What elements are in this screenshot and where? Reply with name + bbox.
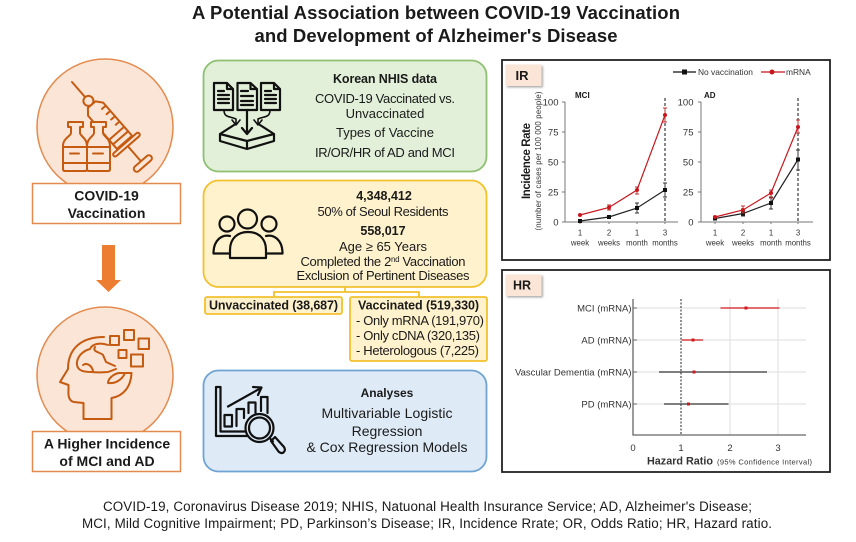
chart: MCI incidence: 1	[635, 228, 639, 238]
text: NHIS data: IR/OR/HR of AD and MCI	[315, 145, 455, 160]
chart: AD incidence	[678, 91, 813, 248]
footnote: abbreviations: COVID-19, Coronavirus Disease 2019; NHIS, Natuonal Health Insurance Service; AD, Alzheimer's Disease;	[103, 499, 752, 514]
chart: AD incidence: 50	[683, 158, 694, 168]
legend: No vaccination	[698, 67, 753, 77]
label: A Higher Incidence of MCI and AD	[32, 432, 180, 472]
chart: MCI incidence: 3	[663, 228, 667, 238]
box: unvaccinated: Unvaccinated (38,687)	[209, 298, 338, 312]
chart: AD incidence: month	[760, 238, 782, 248]
y axis title	[521, 91, 543, 230]
icon: people	[214, 210, 282, 258]
chart: AD incidence: 1	[713, 228, 717, 238]
chart: MCI incidence: 25	[548, 188, 558, 198]
chart: hazard ratio forest plot: (95% Confidence Interval)	[717, 458, 812, 466]
label: COVID-19 Vaccination: COVID-19	[74, 188, 139, 204]
box: vaccinated: - Heterologous (7,225)	[356, 343, 479, 358]
chart: AD incidence: months	[785, 238, 811, 248]
chart: MCI incidence: months	[652, 238, 678, 248]
chart: hazard ratio forest plot: 1	[678, 443, 684, 454]
text: NHIS data: Unvaccinated	[346, 106, 424, 121]
heading: HR	[506, 274, 542, 296]
text: NHIS data: COVID-19 Vaccinated vs.	[315, 91, 455, 106]
title	[192, 2, 680, 46]
icon: documents into tray	[214, 83, 280, 149]
text: cohort counts	[296, 189, 470, 283]
label: A Higher Incidence of MCI and AD: A Higher Incidence	[44, 436, 170, 452]
text: cohort counts: nd	[391, 255, 400, 264]
label: COVID-19 Vaccination	[32, 184, 180, 224]
text: analyses: Analyses	[361, 386, 414, 400]
chart: AD incidence: AD	[704, 91, 716, 100]
label: A Higher Incidence of MCI and AD: of MCI and AD	[59, 453, 155, 469]
text: cohort counts: Age ≥ 65 Years	[339, 239, 428, 254]
box: vaccinated: - Only cDNA (320,135)	[356, 328, 480, 343]
chart: hazard ratio forest plot: MCI (mRNA)	[577, 304, 632, 314]
text: analyses: Multivariable Logistic	[322, 405, 452, 421]
chart: MCI incidence: 50	[548, 158, 558, 168]
chart: AD incidence: 3	[796, 228, 800, 238]
chart: hazard ratio forest plot: Hazard Ratio	[647, 456, 713, 468]
chart: hazard ratio forest plot: Vascular Dementia (mRNA)	[515, 368, 632, 378]
chart: MCI incidence: 100	[543, 98, 558, 108]
legend	[673, 67, 811, 77]
chart: hazard ratio forest plot: 3	[775, 443, 781, 454]
text: NHIS data: Korean NHIS data	[333, 72, 438, 86]
chart: AD incidence: 0	[688, 218, 694, 228]
label: COVID-19 Vaccination: Vaccination	[68, 205, 145, 221]
chart: hazard ratio forest plot: 0	[630, 443, 636, 454]
chart: hazard ratio forest plot: AD (mRNA)	[581, 336, 632, 346]
panel: study population	[204, 180, 486, 287]
chart: AD incidence: 1	[769, 228, 773, 238]
chart: MCI incidence: weeks	[597, 238, 620, 248]
chart: MCI incidence	[543, 91, 678, 248]
panel: IR	[502, 60, 830, 260]
icon: chart with magnifier	[216, 387, 285, 453]
chart: hazard ratio forest plot: 2	[727, 443, 733, 454]
chart: AD incidence: 2	[741, 228, 745, 238]
panel: HR	[502, 270, 830, 472]
panel: analyses	[204, 370, 486, 472]
text: cohort counts: 558,017	[360, 224, 406, 238]
heading: HR: HR	[513, 278, 531, 292]
chart: MCI incidence: week	[570, 238, 589, 248]
arrow: vaccination to incidence	[96, 245, 121, 292]
panel: COVID-19 vaccination	[32, 59, 180, 224]
chart: MCI incidence: MCI	[575, 91, 590, 100]
chart: MCI incidence: month	[626, 238, 648, 248]
chart: hazard ratio forest plot: PD (mRNA)	[581, 400, 632, 410]
box: vaccinated: - Only mRNA (191,970)	[356, 313, 484, 328]
footnote: abbreviations: MCI, Mild Cognitive Impairment; PD, Parkinson’s Disease; IR, Incidence Rrate; OR, Odds Ratio; HR, Hazard ratio.	[82, 516, 772, 531]
chart: AD incidence: 25	[683, 188, 694, 198]
y axis title: Incidence Rate	[521, 123, 533, 199]
title: and Development of Alzheimer's Disease	[254, 25, 618, 46]
chart: MCI incidence: 0	[553, 218, 558, 228]
icon: syringe and vials	[37, 59, 173, 195]
chart: AD incidence: 75	[683, 128, 694, 138]
box: vaccinated: Vaccinated (519,330)	[358, 298, 479, 312]
chart: AD incidence: week	[705, 238, 724, 248]
heading: IR	[506, 64, 542, 86]
text: cohort counts: Vaccination	[399, 254, 466, 269]
text: NHIS data	[315, 72, 455, 160]
chart: hazard ratio forest plot	[515, 299, 812, 468]
text: analyses: Regression	[352, 423, 422, 439]
box: vaccinated	[350, 297, 487, 361]
legend: mRNA	[786, 67, 811, 77]
panel: Korean NHIS data	[204, 60, 486, 172]
chart: AD incidence: weeks	[731, 238, 754, 248]
heading: IR: IR	[516, 68, 529, 83]
y axis title: (number of cases per 100 000 people)	[534, 91, 543, 230]
text: cohort counts: 4,348,412	[356, 189, 412, 203]
text: analyses: & Cox Regression Models	[306, 439, 468, 455]
icon: head with brain	[37, 307, 173, 443]
panel: higher incidence	[32, 307, 180, 472]
text: NHIS data: Types of Vaccine	[336, 125, 434, 140]
text: cohort counts: Completed the 2	[300, 254, 391, 269]
footnote: abbreviations	[82, 499, 772, 531]
text: cohort counts: Exclusion of Pertinent Diseases	[296, 268, 470, 283]
text: cohort counts: 50% of Seoul Residents	[318, 204, 449, 219]
text: analyses	[306, 386, 468, 455]
title: A Potential Association between COVID-19 Vaccination	[192, 2, 680, 23]
connector: cohort split	[274, 287, 419, 297]
chart: AD incidence: 100	[678, 98, 694, 108]
chart: MCI incidence: 75	[548, 128, 558, 138]
chart: MCI incidence: 2	[607, 228, 611, 238]
chart: MCI incidence: 1	[578, 228, 582, 238]
